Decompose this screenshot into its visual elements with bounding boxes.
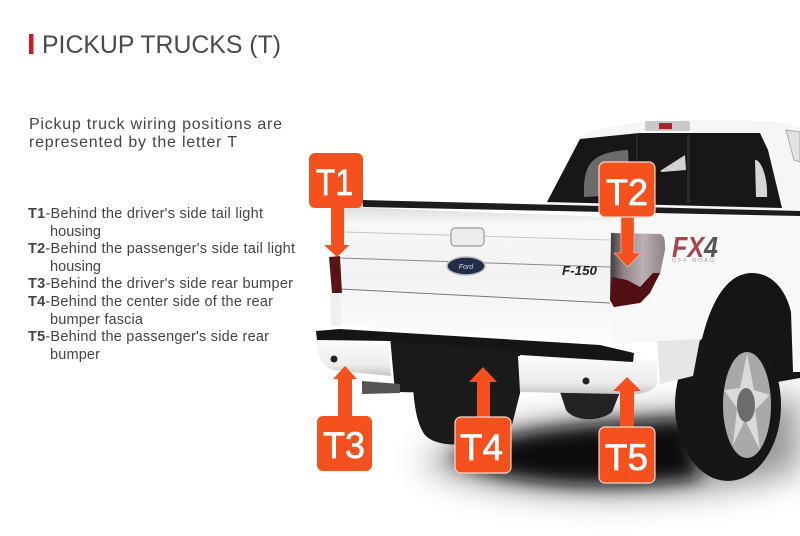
- rear axle tire: [413, 385, 522, 445]
- tailgate: [330, 207, 612, 344]
- FX4 badge: OFF ROAD: [672, 258, 714, 264]
- title: PICKUP TRUCKS (T): [42, 31, 281, 59]
- callout T4: T4: [460, 427, 503, 468]
- wiring position list: T5-Behind the passenger's side rear: [28, 329, 269, 345]
- cab: [548, 120, 800, 216]
- bumper: [316, 329, 700, 395]
- Ford oval logo: [447, 257, 485, 275]
- wiring position list: bumper: [50, 347, 100, 363]
- cab side glass: [786, 130, 800, 162]
- callout T1: T1: [316, 162, 353, 203]
- wiring position list: housing: [50, 224, 101, 240]
- wiring position list: T3-Behind the driver's side rear bumper: [28, 276, 293, 292]
- callout T2: [599, 162, 655, 267]
- intro text: Pickup truck wiring positions are: [29, 116, 282, 133]
- callout T3: T3: [323, 425, 365, 466]
- bed rail: [363, 200, 800, 216]
- wiring position list: bumper fascia: [50, 312, 144, 328]
- FX4 badge: FX4: [672, 232, 718, 264]
- wheel rim: [723, 352, 771, 458]
- wheel arch and well: [695, 273, 800, 385]
- intro text: represented by the letter T: [29, 134, 237, 151]
- brake light: [645, 121, 690, 131]
- tire: [675, 329, 781, 481]
- passenger side tail light: [610, 233, 665, 307]
- callout T4: [455, 367, 511, 473]
- callout T5: [599, 377, 655, 483]
- driver side tail light: [329, 256, 342, 293]
- wiring position list: [28, 206, 295, 363]
- intro text: [29, 116, 282, 151]
- callout T1: [309, 153, 363, 257]
- callout T2: T2: [606, 172, 648, 213]
- F-150 badge: F-150: [562, 263, 598, 278]
- soft outer ground shadow: [420, 395, 800, 495]
- Ford oval logo: Ford: [459, 264, 474, 271]
- ground shadow: [450, 418, 700, 485]
- far-side spare tire: [560, 392, 620, 419]
- wiring position list: housing: [50, 259, 101, 275]
- tailgate handle: [451, 228, 484, 246]
- callout T3: [317, 366, 372, 471]
- rear window: [547, 133, 782, 208]
- wiring position list: T2-Behind the passenger's side tail light: [28, 241, 295, 257]
- bed side: [610, 213, 800, 372]
- wiring position list: T4-Behind the center side of the rear: [28, 294, 273, 310]
- wiring position list: T1-Behind the driver's side tail light: [28, 206, 263, 222]
- pickup truck illustration: [316, 120, 800, 495]
- callout T5: T5: [605, 437, 648, 478]
